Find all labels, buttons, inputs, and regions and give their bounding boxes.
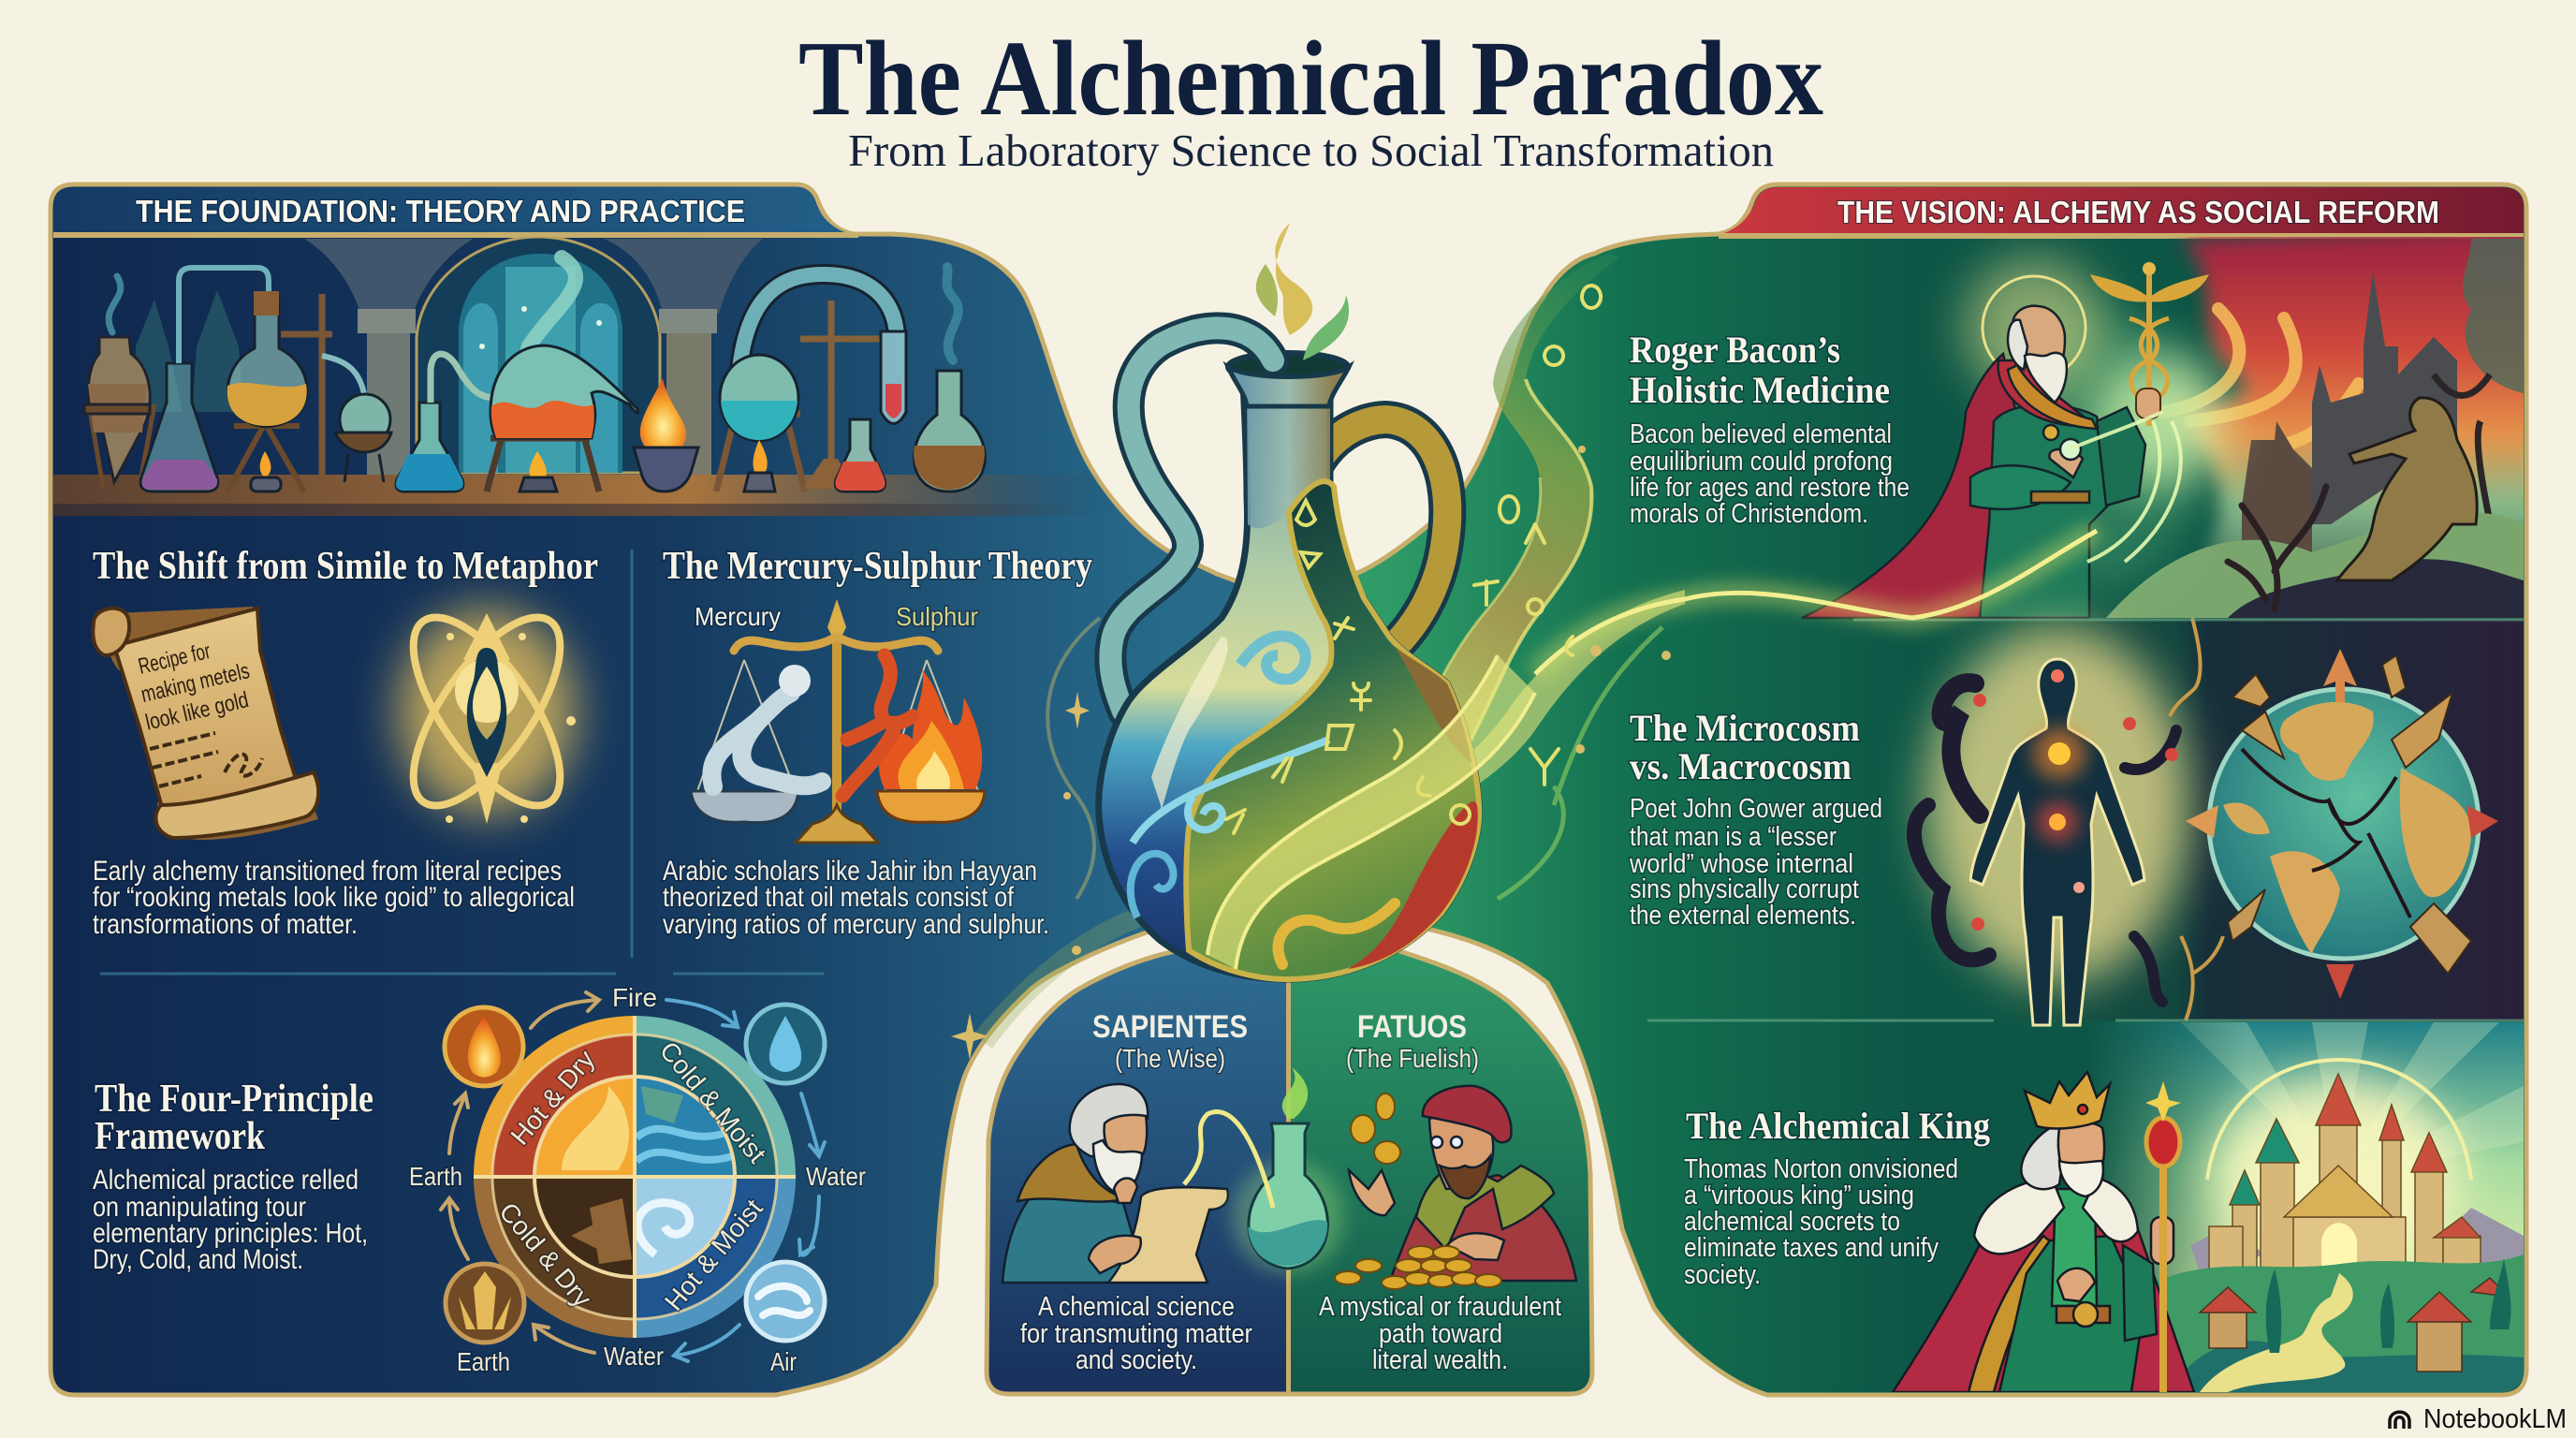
section header tab: [1724, 187, 2524, 234]
fatuos text: path toward: [1379, 1319, 1502, 1349]
chart: four-element wheel: [474, 1016, 796, 1338]
golden road: [2200, 1273, 2353, 1392]
body text: theorized that oil metals consist of: [663, 882, 1015, 913]
ribbon edge lower: [1236, 693, 1535, 969]
icon: scroll recipe: making metels: [139, 658, 252, 708]
arched window: [417, 237, 660, 473]
heading: vs. Macrocosm: [1630, 745, 1852, 787]
figure glow: [1926, 627, 2188, 983]
body text: society.: [1684, 1260, 1761, 1290]
clay urn on tripod: [84, 337, 154, 487]
ribbon edge upper: [1208, 655, 1498, 955]
dark ground: [2228, 559, 2524, 618]
mercury label: Mercury: [695, 602, 781, 631]
jug opening: [1228, 353, 1348, 381]
smoke cloud: [2463, 239, 2524, 393]
chart: four-element wheel: Hot & Moist: [659, 1194, 768, 1316]
icon: balance scale: [691, 599, 985, 843]
jug body glass: [1099, 383, 1479, 979]
jug right half: [1186, 481, 1479, 979]
heading: The Four-Principle: [95, 1078, 373, 1121]
body text: Arabic scholars like Jahir ibn Hayyan: [663, 856, 1037, 887]
flame streaks: [2162, 309, 2359, 449]
laboratory illustration: [53, 237, 1120, 516]
icon: air swirl: [746, 1262, 825, 1341]
figure: foolish man with coins: [1349, 1086, 1576, 1281]
row 1 text: [1630, 329, 1910, 529]
body text: Bacon believed elemental: [1630, 419, 1892, 449]
section header tab: [53, 187, 847, 234]
arch: right green half: [1288, 917, 1593, 1395]
green hills: [2144, 1255, 2524, 1392]
quadrant labels: Hot & Dry: [505, 1045, 600, 1151]
cross and rings: [474, 1016, 796, 1338]
central jug: [1099, 223, 1601, 979]
water swirls: [1133, 740, 1329, 843]
yellow swirl: [1279, 903, 1395, 964]
body text: varying ratios of mercury and sulphur.: [663, 909, 1049, 940]
arrows around wheel: [441, 992, 825, 1361]
body text: Dry, Cold, and Moist.: [93, 1244, 303, 1275]
healing glow: [2092, 356, 2223, 487]
sapientes subtitle: (The Wise): [1115, 1044, 1225, 1073]
arch outline: [987, 922, 1592, 1394]
body text: Early alchemy transitioned from literal recipes: [93, 856, 562, 887]
heading: Holistic Medicine: [1630, 369, 1890, 411]
ribbon left edge: [1413, 477, 1541, 740]
globe: [2209, 689, 2479, 959]
heading: The Shift from Simile to Metaphor: [93, 545, 598, 588]
brown right belly: [1395, 646, 1471, 763]
smoke left: [109, 276, 121, 332]
row 3 illustration: alchemical king: [1893, 1022, 2524, 1392]
body text: for “rooking metals look like goid” to allegorical: [93, 882, 575, 913]
coin pile: [1335, 1093, 1501, 1289]
subsection: mercury sulphur theory: [663, 545, 1092, 940]
element labels: Water: [806, 1162, 866, 1191]
towers: [2312, 271, 2457, 524]
stone vaults: [304, 239, 763, 314]
dark background: [2012, 620, 2524, 1020]
dark trees: [2434, 374, 2499, 562]
shelf: [53, 475, 1120, 516]
sky rays: [2181, 1022, 2524, 1180]
heading: Roger Bacon’s: [1630, 329, 1840, 371]
energy points: [2033, 669, 2086, 893]
earth rocks: [571, 1198, 632, 1264]
cypress trees: [2266, 1259, 2510, 1353]
row 2 text: [1629, 707, 1882, 931]
dome glow: [2217, 1077, 2460, 1283]
dome arc: [2207, 1060, 2471, 1180]
right handle fill: [1305, 419, 1447, 646]
body text: morals of Christendom.: [1630, 499, 1868, 529]
blue conical flask: [396, 354, 496, 492]
alembic with long tube: [716, 274, 897, 492]
body text: equilibrium could profong: [1630, 447, 1893, 477]
conical flask with purple liquid: [140, 268, 269, 492]
bright ribbon glow: [1535, 531, 2097, 674]
icon: [2390, 1412, 2409, 1429]
figure: sage with scroll: [1003, 1084, 1228, 1283]
sapientes text: and society.: [1076, 1345, 1197, 1375]
icon: fire: [445, 1007, 523, 1086]
smoke right: [946, 267, 959, 360]
element labels: [409, 983, 866, 1376]
row 3 text: [1684, 1105, 1990, 1290]
shelf shadow: [53, 504, 1083, 516]
houses: [2200, 1278, 2509, 1372]
header underline: [53, 232, 858, 238]
heading: The Alchemical King: [1686, 1105, 1990, 1147]
alchemical symbols: [1226, 286, 1601, 833]
element labels: Earth: [409, 1162, 462, 1191]
body text: elementary principles: Hot,: [93, 1218, 368, 1249]
chart: four-element wheel: Cold & Moist: [654, 1036, 772, 1168]
icon: water drop: [746, 1005, 825, 1083]
round flask with amber liquid: [227, 291, 307, 492]
fatuos text: A mystical or fraudulent: [1319, 1292, 1561, 1322]
gate glow: [2321, 1223, 2357, 1273]
flame inner: [899, 721, 964, 789]
human silhouette: [1970, 659, 2144, 1025]
element labels: Fire: [612, 983, 657, 1012]
right handle: [1305, 419, 1447, 646]
icon: earth crystals: [446, 1264, 524, 1343]
fatuos text: literal wealth.: [1372, 1345, 1508, 1375]
NotebookLM mark: [2390, 1404, 2567, 1434]
distant silhouette shapes: [136, 290, 243, 412]
subsection: four-principle framework: [93, 983, 866, 1376]
base of stand: [803, 459, 841, 489]
test tube: [881, 331, 906, 423]
arrows and rocks: [2186, 649, 2498, 999]
icon: scroll recipe: [93, 607, 318, 840]
figure: king: [1893, 1072, 2194, 1392]
red sky and flames: [2153, 225, 2546, 618]
body text: life for ages and restore the: [1630, 473, 1910, 503]
continent: [641, 1086, 683, 1123]
cross stand: [800, 301, 880, 459]
body text: a “virtoous king” using: [1684, 1181, 1914, 1211]
body text: world” whose internal: [1629, 849, 1853, 879]
panel: the foundation: [51, 184, 1284, 1395]
row 2 illustration: microcosm: [1914, 618, 2524, 1025]
sky: [2087, 1022, 2524, 1392]
panel: the vision: [1284, 184, 2526, 1395]
stone pillars: [358, 309, 717, 475]
sky fade into panel: [2087, 1022, 2247, 1392]
figure: monk: [1802, 306, 2145, 618]
fatuos subtitle: (The Fuelish): [1346, 1044, 1479, 1073]
ruined wall: [2242, 421, 2312, 562]
flames above jug: [1256, 223, 1349, 360]
chart: four-element wheel: Cold & Dry: [493, 1197, 597, 1313]
flame swirl: [562, 1086, 629, 1170]
tendrils: [1914, 682, 2176, 1002]
body text: eliminate taxes and unify: [1684, 1233, 1939, 1263]
heading: The Microcosm: [1630, 707, 1860, 749]
halo glow: [1964, 257, 2104, 398]
icon: caduceus: [2090, 262, 2209, 426]
large brown flask: [914, 371, 985, 492]
green glow around monk: [1994, 309, 2200, 590]
header text: THE VISION: ALCHEMY AS SOCIAL REFORM: [1837, 195, 2439, 229]
glass highlight: [1151, 637, 1228, 809]
fatuos heading: FATUOS: [1357, 1009, 1467, 1045]
body text: alchemical socrets to: [1684, 1207, 1900, 1237]
mortar with flame: [634, 378, 698, 492]
central divider: [1286, 974, 1291, 1394]
iron stand and bulb: [281, 294, 391, 482]
element labels: Earth: [457, 1347, 510, 1376]
sapientes text: for transmuting matter: [1020, 1319, 1252, 1349]
retort with burner: [487, 345, 638, 492]
air swirl: [637, 1203, 690, 1255]
ribbon edge lines: [1460, 379, 1591, 758]
title: The Alchemical Paradox: [798, 19, 1823, 138]
crack line: [2170, 618, 2223, 1020]
neck tint: [1247, 386, 1330, 528]
lower right wisp: [1498, 627, 1662, 899]
red vortex points: [1971, 694, 2178, 931]
row dividers: [1647, 620, 2524, 1020]
row 1 illustration: Roger Bacon: [1802, 225, 2546, 618]
dead tree: [2228, 487, 2326, 609]
icon: green flask: [1184, 1067, 1344, 1273]
mercury figure: [711, 693, 822, 786]
heading: The Mercury-Sulphur Theory: [663, 545, 1092, 588]
central panel: sapientes and fatuos: [987, 917, 1593, 1395]
castle: [2209, 1074, 2481, 1283]
wide yellow band right: [1310, 590, 1685, 899]
body text: sins physically corrupt: [1630, 874, 1859, 904]
scepter: [2145, 1081, 2181, 1392]
small red flask: [835, 419, 886, 492]
darker foreground bushes: [2172, 1341, 2524, 1392]
water waves: [637, 1129, 732, 1161]
sulphur label: Sulphur: [896, 602, 978, 631]
heading: Framework: [95, 1115, 266, 1158]
healing streams: [2069, 412, 2181, 562]
upper swirl: [1240, 636, 1306, 680]
body text: Poet John Gower argued: [1630, 794, 1882, 824]
left looped tube: [1110, 328, 1273, 712]
flame: [879, 669, 982, 789]
sapientes text: A chemical science: [1038, 1292, 1235, 1322]
lower swirl: [1131, 854, 1174, 917]
icon: scroll recipe: look like gold: [143, 687, 251, 736]
icon: glowing star: [387, 595, 587, 828]
body text: the external elements.: [1630, 901, 1856, 931]
green hills: [2106, 513, 2524, 618]
header text: THE FOUNDATION: THEORY AND PRACTICE: [136, 194, 745, 228]
bright ribbon: [1535, 531, 2097, 674]
header underline: [1719, 233, 2524, 239]
subsection: simile to metaphor: [93, 545, 598, 940]
distant mountains: [2190, 1208, 2524, 1311]
subtitle: From Laboratory Science to Social Transformation: [848, 125, 1774, 176]
subsection divider lines: [100, 550, 824, 974]
left looped tube fill: [1110, 328, 1273, 712]
body text: on manipulating tour: [93, 1192, 306, 1223]
left wisps: [1047, 618, 1100, 899]
sapientes heading: SAPIENTES: [1092, 1009, 1248, 1045]
element labels: Air: [770, 1347, 797, 1376]
arch: left blue half: [987, 917, 1288, 1395]
element labels: Water: [604, 1342, 664, 1371]
panel body: left outline: [51, 184, 1284, 1395]
sparkles: [951, 446, 1671, 1060]
red lower right: [1348, 801, 1478, 969]
flowing ribbons from the jug: [973, 253, 2097, 1049]
body text: Thomas Norton onvisioned: [1684, 1154, 1958, 1184]
body text: transformations of matter.: [93, 909, 358, 940]
flame core: [916, 751, 950, 789]
panel body: right outline: [1284, 184, 2526, 1395]
icon: scroll recipe: Recipe for: [136, 638, 212, 680]
body text: Alchemical practice relled: [93, 1165, 359, 1196]
sick figure: [2337, 398, 2477, 580]
sulphur figure: [842, 655, 913, 796]
jug rim flare: [1228, 367, 1349, 406]
ribbon over jug: [1208, 655, 1535, 969]
body text: that man is a “lesser: [1630, 822, 1837, 852]
wordmark: NotebookLM: [2423, 1404, 2567, 1434]
halo ring: [1983, 276, 2086, 379]
upper gold ribbon: [1413, 253, 1619, 758]
soft gold band left: [973, 903, 1156, 1049]
